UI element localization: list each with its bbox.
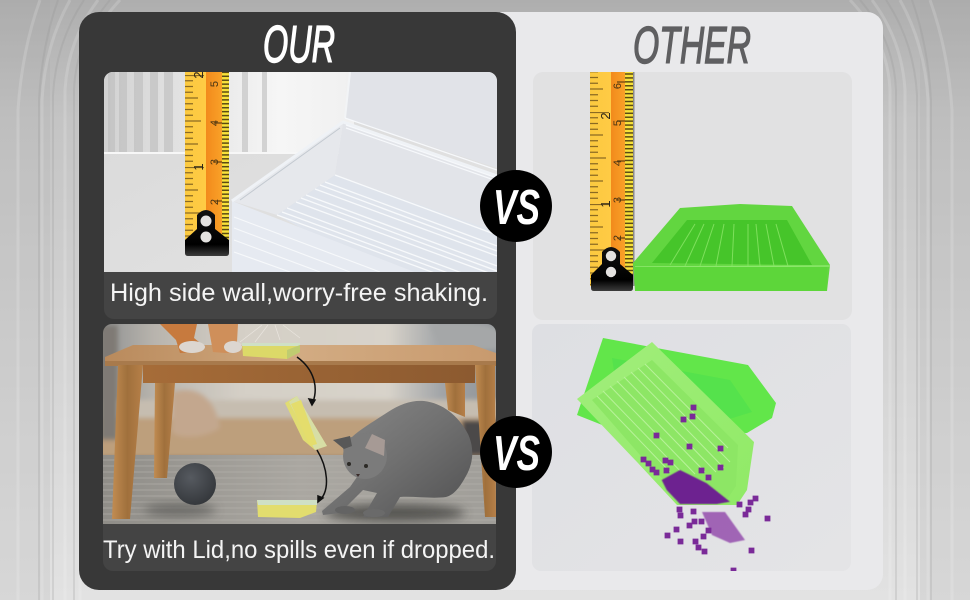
orange cat paws on table — [160, 324, 300, 353]
heading: OUR: OUR — [263, 16, 335, 74]
photo: other tray spilling gems — [532, 324, 851, 573]
room background — [98, 320, 502, 458]
photo: other tray with tape measure — [533, 72, 852, 320]
box on table — [242, 343, 300, 359]
falling box — [285, 396, 327, 450]
icon: tape measure: 4 — [209, 120, 221, 126]
rug — [103, 455, 496, 524]
photo: cat knocks tray off table — [98, 320, 502, 534]
caption: try with lid — [103, 524, 496, 571]
icon: tape measure — [590, 72, 634, 291]
ball — [174, 463, 216, 505]
icon: tape measure: 6 — [612, 83, 624, 89]
badge: VS bottom: VS — [493, 427, 540, 481]
caption: high side wall — [104, 272, 497, 319]
icon: tape measure: 2 — [598, 112, 613, 120]
badge: VS bottom — [480, 416, 552, 488]
purple gems — [641, 405, 770, 573]
clear box — [231, 72, 497, 272]
landed box — [257, 500, 317, 518]
panel: our product — [79, 12, 516, 590]
arrows — [297, 357, 326, 502]
green tray — [633, 204, 830, 291]
icon: tape measure: 1 — [191, 163, 206, 171]
icon: tape measure — [185, 71, 229, 256]
heading: OTHER: OTHER — [633, 17, 751, 75]
caption: high side wall: High side wall,worry-free shaking. — [110, 279, 488, 307]
icon: tape measure: 2 — [209, 199, 221, 205]
grey cat — [322, 401, 472, 517]
icon: tape measure: 4 — [612, 160, 624, 166]
icon: tape measure: 5 — [612, 120, 624, 126]
panel: other product — [500, 12, 883, 590]
icon: tape measure: 3 — [612, 197, 624, 203]
table — [105, 345, 496, 519]
icon: tape measure: 2 — [612, 235, 624, 241]
green trays — [577, 338, 776, 505]
icon: tape measure: 1 — [598, 200, 613, 208]
photo: our tray with tape measure — [104, 72, 497, 272]
badge: VS top — [480, 170, 552, 242]
caption: try with lid: Try with Lid,no spills even if dropped. — [103, 536, 495, 564]
icon: tape measure: 3 — [209, 159, 221, 165]
badge: VS top: VS — [493, 181, 540, 235]
icon: tape measure: 2 — [191, 71, 206, 79]
icon: tape measure: 5 — [209, 81, 221, 87]
